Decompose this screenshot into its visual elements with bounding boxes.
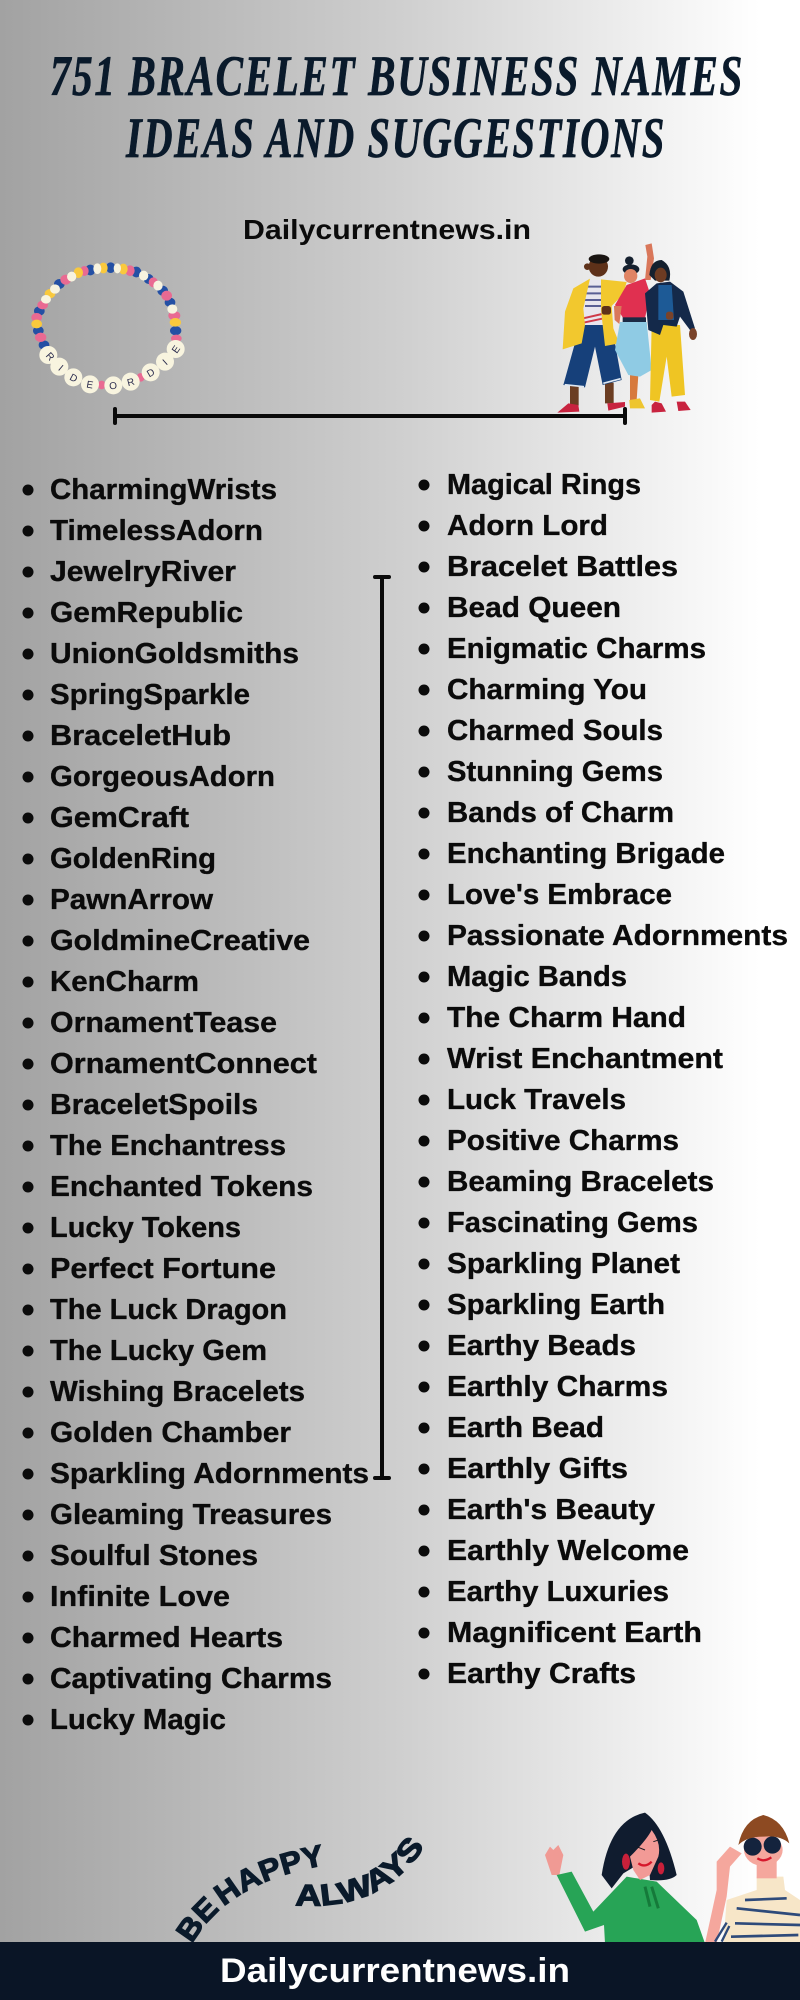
- list: right column of names: Magic Bands: [447, 961, 627, 993]
- list: right column of names: Luck Travels: [447, 1084, 626, 1116]
- horizontal bracket line: [115, 409, 625, 423]
- list: left column of names: SpringSparkle: [50, 679, 250, 711]
- list: right column of names: Fascinating Gems: [447, 1207, 698, 1239]
- list: right column of names: Earth Bead: [447, 1412, 604, 1444]
- list: left column of names: JewelryRiver: [50, 556, 236, 588]
- list: left column of names: KenCharm: [50, 966, 199, 998]
- list: left column of names: BraceletHub: [50, 720, 231, 752]
- list: right column of names: Enchanting Brigade: [447, 838, 725, 870]
- icon: bead bracelet: R: [43, 351, 56, 363]
- subtitle: website name: Dailycurrentnews.in: [243, 214, 531, 245]
- list: left column of names: CharmingWrists: [50, 474, 277, 506]
- list: right column of names: Charmed Souls: [447, 715, 663, 747]
- list: left column of names: GoldenRing: [50, 843, 216, 875]
- list: right column of names: Bands of Charm: [447, 797, 674, 829]
- icon: bead bracelet: R: [126, 377, 136, 389]
- list: right column of names: Sparkling Earth: [447, 1289, 665, 1321]
- icon: bead bracelet: O: [109, 381, 118, 392]
- list: left column of names: [22, 474, 369, 1736]
- vertical bracket line: [375, 577, 389, 1478]
- list: right column of names: Adorn Lord: [447, 510, 608, 542]
- list: left column of names: Wishing Bracelets: [50, 1376, 305, 1408]
- list: right column of names: Bead Queen: [447, 592, 621, 624]
- icon: bead bracelet: I: [56, 363, 65, 374]
- list: right column of names: Charming You: [447, 674, 647, 706]
- list: right column of names: Enigmatic Charms: [447, 633, 706, 665]
- illustration: two women waving: [545, 1813, 800, 1943]
- icon: bead bracelet: E: [170, 344, 183, 356]
- icon: bead bracelet: D: [67, 372, 79, 385]
- list: left column of names: GoldmineCreative: [50, 925, 310, 957]
- list: right column of names: Bracelet Battles: [447, 551, 678, 583]
- list: left column of names: Captivating Charms: [50, 1663, 332, 1695]
- list: left column of names: Charmed Hearts: [50, 1622, 283, 1654]
- list: right column of names: Earthly Welcome: [447, 1535, 689, 1567]
- list: left column of names: Gleaming Treasures: [50, 1499, 332, 1531]
- list: left column of names: Lucky Magic: [50, 1704, 226, 1736]
- list: right column of names: [418, 469, 788, 1690]
- list: left column of names: The Luck Dragon: [50, 1294, 287, 1326]
- list: right column of names: Positive Charms: [447, 1125, 679, 1157]
- icon: bead bracelet: E: [86, 380, 94, 392]
- list: right column of names: Earthy Beads: [447, 1330, 636, 1362]
- list: left column of names: Golden Chamber: [50, 1417, 291, 1449]
- footer bar: [0, 1942, 800, 2000]
- list: left column of names: Sparkling Adornments: [50, 1458, 369, 1490]
- icon: bead bracelet: D: [145, 367, 157, 380]
- list: right column of names: Wrist Enchantment: [447, 1043, 723, 1075]
- footer bar: Dailycurrentnews.in: [220, 1952, 570, 1990]
- list: right column of names: Sparkling Planet: [447, 1248, 680, 1280]
- curved slogan: be happy always: BE HAPPY: [175, 1844, 322, 1942]
- list: left column of names: GemCraft: [50, 802, 189, 834]
- list: left column of names: Perfect Fortune: [50, 1253, 276, 1285]
- list: left column of names: OrnamentTease: [50, 1007, 277, 1039]
- list: right column of names: Earthy Crafts: [447, 1658, 636, 1690]
- list: left column of names: Lucky Tokens: [50, 1212, 241, 1244]
- icon: bead bracelet: I: [161, 358, 170, 368]
- list: left column of names: BraceletSpoils: [50, 1089, 258, 1121]
- list: left column of names: UnionGoldsmiths: [50, 638, 299, 670]
- list: right column of names: Magical Rings: [447, 469, 641, 501]
- curved slogan: be happy always: [175, 1838, 422, 1942]
- list: right column of names: Love's Embrace: [447, 879, 672, 911]
- list: left column of names: Soulful Stones: [50, 1540, 258, 1572]
- title: [50, 45, 744, 170]
- list: left column of names: OrnamentConnect: [50, 1048, 317, 1080]
- list: left column of names: Enchanted Tokens: [50, 1171, 313, 1203]
- list: left column of names: The Enchantress: [50, 1130, 286, 1162]
- list: left column of names: GorgeousAdorn: [50, 761, 275, 793]
- list: right column of names: Earthy Luxuries: [447, 1576, 669, 1608]
- list: right column of names: Earth's Beauty: [447, 1494, 655, 1526]
- list: right column of names: Beaming Bracelets: [447, 1166, 714, 1198]
- list: right column of names: Earthly Charms: [447, 1371, 668, 1403]
- curved slogan: be happy always: ALWAYS: [295, 1838, 422, 1906]
- list: right column of names: Earthly Gifts: [447, 1453, 628, 1485]
- list: right column of names: The Charm Hand: [447, 1002, 686, 1034]
- list: left column of names: Infinite Love: [50, 1581, 230, 1613]
- illustration: three friends: [557, 243, 697, 413]
- list: right column of names: Passionate Adornments: [447, 920, 788, 952]
- list: right column of names: Stunning Gems: [447, 756, 663, 788]
- icon: bead bracelet: [32, 263, 185, 394]
- list: left column of names: The Lucky Gem: [50, 1335, 267, 1367]
- list: right column of names: Magnificent Earth: [447, 1617, 702, 1649]
- list: left column of names: TimelessAdorn: [50, 515, 263, 547]
- list: left column of names: GemRepublic: [50, 597, 243, 629]
- list: left column of names: PawnArrow: [50, 884, 213, 916]
